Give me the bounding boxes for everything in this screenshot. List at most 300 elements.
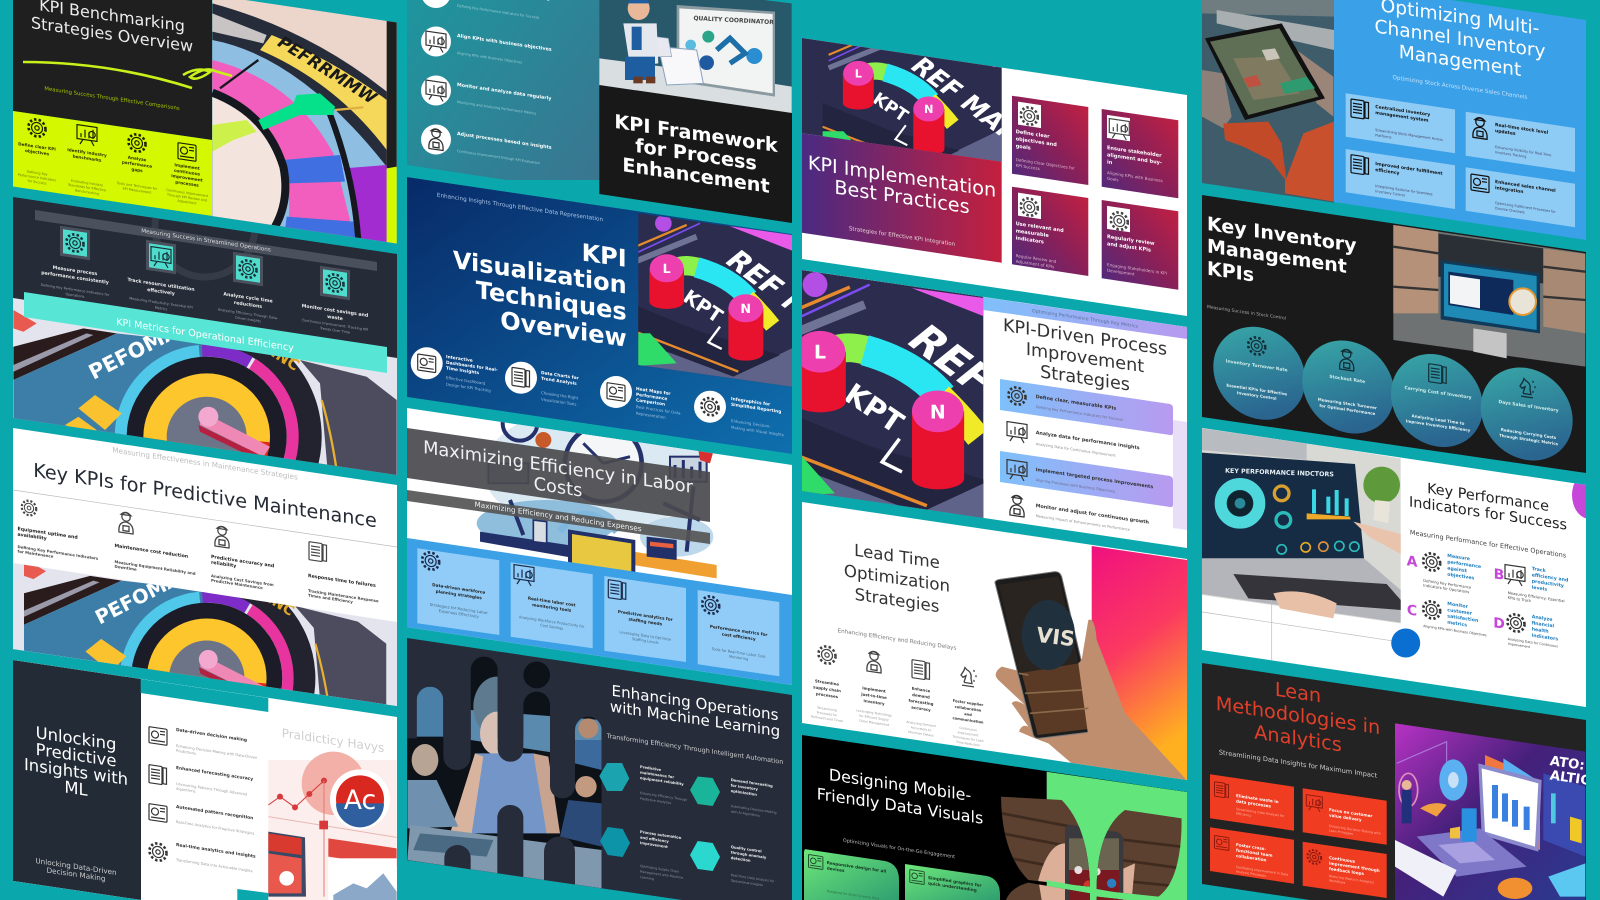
item A: Indicators for Operations	[1423, 584, 1469, 594]
item D: health	[1532, 626, 1549, 635]
item: response: Times and Efficiency	[308, 593, 353, 604]
item: uptime: availability	[18, 532, 47, 542]
card: customer value: value delivery	[1329, 812, 1362, 822]
slide: Maximizing Efficiency in Labor Costs	[407, 400, 792, 700]
subtitle: Streamlining Data Insights for Maximum Impact	[1219, 748, 1378, 780]
card: eliminate waste: Streamlining Data Analysis for	[1236, 807, 1285, 818]
item: supply chain: Streamline	[815, 678, 839, 687]
item: infographics: Enhancing Decision-	[731, 418, 771, 429]
icon	[178, 143, 196, 161]
slide base	[802, 495, 1187, 795]
card: objectives: Defining Clear Objectives for	[1016, 157, 1075, 171]
item: adjust processes	[421, 124, 552, 165]
item: implement improvement: Implement	[174, 162, 200, 171]
row: define KPIs: Defining Key Performance Indicators for Success	[1036, 405, 1123, 422]
item: analyze cycle: reductions	[234, 300, 262, 310]
card: staffing analytics	[604, 576, 686, 662]
image: performance dial	[212, 0, 397, 247]
item: demand forecasting	[690, 776, 777, 820]
item: implement improvement: Adjustment	[178, 199, 197, 206]
icon	[694, 391, 726, 423]
item: identify benchmarks	[67, 125, 107, 197]
item: dashboards	[411, 347, 498, 393]
circle: carrying cost: Improve Inventory Efficiency	[1406, 418, 1471, 433]
subtitle: Measuring Success in Streamlined Operations	[141, 227, 271, 254]
icon	[867, 650, 881, 673]
icon	[149, 727, 167, 745]
item: adjust processes: Continuous Improvement through KPI Evaluation	[457, 149, 540, 165]
card: centralized system: Streamlining Stock Management Across	[1375, 128, 1443, 142]
item: supply chain: Streamlining	[817, 706, 837, 712]
item: pattern recognition	[149, 804, 254, 836]
title: Lean	[1275, 678, 1321, 707]
icon	[422, 551, 439, 571]
cards section	[407, 538, 792, 690]
card: stock updates: updates	[1495, 128, 1516, 137]
item: analyze gaps: Tools and Techniques for	[116, 181, 158, 191]
hex icon	[600, 827, 630, 857]
item: heat maps: Representation	[636, 410, 666, 420]
item: monitor cost	[302, 266, 368, 337]
slide base	[802, 730, 1187, 900]
card: stakeholders: Aligning KPIs with Business	[1107, 170, 1163, 183]
faint ring	[152, 218, 258, 280]
slide base	[407, 400, 792, 700]
item: real-time analytics: Real-time analytics and insights	[176, 842, 256, 860]
item: define objectives: Performance Indicators	[18, 173, 56, 182]
icon	[702, 595, 719, 615]
icon	[119, 511, 133, 534]
card: review KPIs: and adjust KPIs	[1107, 241, 1151, 254]
title: Channel Inventory	[1374, 16, 1546, 63]
card: cross-functional: Facilitating Improvement in Data	[1236, 865, 1288, 877]
item: quality control	[690, 841, 775, 889]
item: uptime: Defining Key Performance Indicators	[18, 544, 99, 561]
item B: productivity	[1532, 578, 1564, 589]
slide: KPI Metrics for Operational Efficiency	[13, 197, 397, 475]
item: accuracy: Predictive Maintenance	[211, 578, 263, 590]
item: supply chain: Reduced Lead Times	[811, 714, 843, 723]
item: demand forecasting: Analyzing Demand	[906, 720, 936, 728]
item: monitor cost: Trends Over Time	[319, 326, 350, 335]
title: Predictive	[36, 740, 116, 771]
card: labor cost monitoring: Analyzing Workforce Productivity for	[519, 615, 585, 629]
circle: stockout rate: Measuring Stock Turnover	[1318, 397, 1377, 410]
item: demand forecasting: Enhance	[912, 686, 931, 693]
card: continuous improvement: improvement through	[1329, 860, 1380, 873]
item: monitor cost: Monitor cost savings and	[302, 303, 368, 319]
title: Enhancing Operations	[612, 682, 779, 724]
card: stock updates: Inventory Tracking	[1495, 150, 1526, 159]
card: responsive design	[804, 849, 899, 900]
icon	[1351, 99, 1368, 120]
item: demand forecasting: Minimize Delays	[908, 730, 934, 738]
icon	[910, 870, 924, 884]
circle: turnover rate: Essential KPIs for Effective	[1226, 383, 1287, 397]
card: simplified graphics: quick understanding	[928, 880, 977, 893]
card: workforce planning	[417, 548, 499, 635]
title: KPI Implementation	[808, 151, 996, 202]
card: workforce planning: Strategies for Reducing Labor	[430, 602, 488, 615]
item: heat maps: Best Practices for Data	[636, 404, 681, 416]
title: Analytics	[1254, 721, 1342, 756]
item: implement improvement: improvement	[171, 173, 203, 183]
item: align KPIs	[421, 26, 552, 65]
subtitle: Enhancing Insights Through Effective Data Representation	[437, 192, 604, 223]
item: predictive maintenance	[599, 763, 687, 808]
slide: Designing Mobile-Friendly Data Visuals	[802, 730, 1187, 900]
icon	[1007, 460, 1027, 481]
card: order fulfillment: Inventory Control	[1375, 189, 1405, 198]
image caption: Praldicticy Havys	[282, 726, 384, 755]
title: for Process	[635, 134, 757, 175]
item: measure process	[41, 226, 110, 303]
slide base	[407, 177, 792, 454]
image: hand holding phone	[995, 572, 1187, 780]
item: monitor data	[421, 76, 552, 116]
item: heat maps	[600, 376, 681, 422]
item: charts: Trend Analysis	[541, 376, 577, 387]
item: process automation: Management with Machine	[640, 870, 683, 880]
item: quality control: through anomaly	[731, 850, 767, 860]
item: response: Response time to failures	[308, 573, 376, 589]
title: Key Inventory	[1207, 213, 1357, 257]
card: responsive design: devices	[827, 866, 845, 873]
circle: turnover rate	[1213, 320, 1305, 426]
icon tile	[233, 252, 263, 286]
item: uptime: Equipment uptime and	[18, 526, 78, 541]
card: indicators: Regular Review and	[1016, 253, 1057, 264]
row: define KPIs: Define clear, measurable KPIs	[1036, 394, 1116, 412]
card: order fulfillment	[1346, 149, 1455, 209]
title: Enhancement	[622, 153, 770, 198]
icon	[1007, 422, 1027, 443]
rule	[13, 490, 397, 547]
hex icon	[690, 776, 720, 806]
item A: objectives	[1447, 572, 1475, 582]
card: stakeholders: alignment and buy-	[1107, 152, 1162, 166]
card: cross-functional: Foster cross-	[1236, 842, 1266, 851]
card: customer value	[1303, 788, 1387, 845]
item: process automation	[600, 827, 683, 885]
icon	[818, 645, 836, 665]
image: office doodle	[477, 406, 717, 580]
item: demand forecasting: Accurately to	[911, 725, 931, 732]
item: analyze cycle: Driven Insights	[235, 316, 261, 323]
item: cost	[114, 511, 196, 581]
item: adjust processes: Adjust processes based on insights	[457, 131, 552, 151]
title: Unlocking	[36, 723, 116, 754]
item: supplier collaboration	[952, 667, 984, 748]
item: demand forecasting: accuracy	[911, 704, 931, 712]
circle: days sales: Through Strategic Metrics	[1499, 433, 1559, 446]
item C	[1407, 600, 1487, 637]
item: analyze gaps: performance	[122, 159, 152, 169]
image: KPT dial	[472, 103, 1218, 749]
slide: Enhancing Operations with Machine Learning	[407, 630, 792, 900]
slide: KPI Visualization Techniques Overview	[407, 102, 933, 535]
item: accuracy	[211, 525, 274, 592]
card: cost efficiency metrics: Tools for Real-Time Labor Cost	[711, 647, 766, 659]
card: stakeholders: Ensure stakeholder	[1107, 145, 1162, 159]
green panel	[1047, 772, 1187, 900]
title: ML	[64, 777, 89, 800]
title: Methodologies in	[1216, 692, 1380, 739]
card: responsive design: Responsive design for all	[827, 860, 887, 874]
item: identify benchmarks: Benchmarking	[75, 188, 99, 196]
icon	[421, 76, 451, 106]
icon	[1214, 836, 1229, 850]
image: warehouse monitor	[1393, 225, 1585, 367]
icon	[1471, 174, 1489, 193]
card: customer value: Lean Principles	[1329, 828, 1353, 836]
item: demand forecasting: optimization	[731, 789, 757, 797]
decorative chart lines	[1202, 600, 1400, 700]
icon	[1107, 115, 1130, 141]
card: centralized system	[1346, 93, 1455, 153]
icon	[505, 362, 537, 394]
icon tile	[60, 226, 90, 260]
circle: days sales	[1481, 361, 1573, 467]
card: review KPIs: Development	[1107, 268, 1135, 277]
item: just-in-time: for Efficient Supply	[859, 714, 889, 722]
icon tile	[146, 240, 176, 274]
card: labor cost monitoring	[511, 562, 593, 648]
card: eliminate waste: Eliminate waste in	[1236, 793, 1279, 804]
item: forecasting	[149, 765, 253, 801]
item: implement improvement: Through KPI Review and	[166, 192, 207, 203]
item: supplier collaboration: and	[964, 712, 972, 717]
list panel	[407, 0, 600, 180]
item: heat maps: Comparison	[636, 397, 665, 408]
card: staffing analytics: Staffing Levels	[632, 637, 659, 645]
item: supplier collaboration: Time Reduction	[955, 740, 980, 747]
item: heat maps: Performance	[636, 392, 667, 402]
item: just-in-time: Implement	[862, 685, 886, 694]
icon	[1018, 102, 1041, 128]
title: Key Performance	[1427, 481, 1549, 515]
item: charts: Data Charts for	[541, 370, 579, 382]
item: charts	[505, 362, 579, 407]
item: supplier collaboration: Techniques for Lead	[952, 734, 983, 743]
slide base	[802, 30, 1187, 330]
row: define KPIs	[1000, 379, 1173, 435]
slide base	[1202, 420, 1586, 720]
item B: KPIs to Track	[1508, 596, 1532, 603]
icon	[1107, 206, 1130, 232]
cut-out top	[141, 679, 268, 712]
lime panel	[13, 111, 212, 216]
title: Designing Mobile-	[829, 765, 971, 805]
icon	[808, 855, 823, 869]
image: isometric analytics: ALTICS	[1549, 767, 1600, 790]
image: isometric analytics: ATO:	[1549, 753, 1586, 773]
item: supplier collaboration: Improvement	[958, 730, 979, 738]
card: objectives: goals	[1016, 143, 1031, 152]
card: stock updates: Enhancing Visibility for Real-Time	[1495, 145, 1551, 157]
icon	[421, 124, 451, 154]
item: just-in-time	[856, 650, 892, 727]
slide base	[13, 420, 397, 720]
icon	[1248, 336, 1265, 356]
item: just-in-time: Chain Management	[859, 719, 890, 727]
item: infographics: Simplified Reporting	[731, 402, 781, 415]
card: workforce planning: planning strategies	[436, 589, 482, 600]
title: Management	[1207, 235, 1347, 278]
icon	[128, 133, 146, 153]
card: review KPIs	[1102, 200, 1178, 290]
card: simplified graphics	[905, 864, 1000, 900]
item D: Improvement	[1508, 642, 1531, 649]
item: charts: Visualization Tools	[541, 396, 576, 407]
title: KPI Metrics for Operational Efficiency	[116, 317, 294, 354]
subtitle: Enhancing Efficiency and Reducing Delays	[838, 627, 956, 652]
circle: carrying cost: Analyzing Lead Time to	[1412, 413, 1465, 426]
circle: turnover rate: Inventory Control	[1237, 390, 1277, 401]
title: Key KPIs for Predictive Maintenance	[33, 459, 377, 532]
item: supplier collaboration: Foster supplier	[953, 699, 984, 707]
card: continuous improvement: Workflows	[1329, 878, 1346, 885]
card: stock updates: Real-time stock level	[1495, 122, 1549, 136]
icon	[514, 565, 534, 586]
image: laptop dashboard: KEY PERFORMANCE INDCTORS	[1225, 467, 1334, 478]
row: targeted improvements: Aligning Processes with Business Objectives	[1036, 478, 1115, 494]
subtitle: Strategies for Effective KPI Integration	[849, 225, 956, 248]
item: analyze gaps	[116, 133, 158, 196]
item: forecasting: Uncovering Patterns Through Advanced	[176, 782, 247, 797]
image: performance dial	[13, 298, 397, 475]
item: pattern recognition: Automated pattern recognition	[176, 804, 253, 821]
title: Indicators for Success	[1409, 494, 1567, 534]
slide: Lean Methodologies in Analytics	[1202, 655, 1600, 900]
title: Insights with	[24, 755, 128, 789]
item: quality control: Real-Time Data Analysis for	[731, 873, 775, 884]
circle: carrying cost: Carrying Cost of Inventory	[1404, 385, 1472, 401]
icon	[421, 0, 451, 8]
item: supplier collaboration: communication	[953, 716, 984, 725]
item: demand forecasting	[906, 660, 936, 738]
item: dashboards: Time Insights	[446, 365, 479, 376]
title panel	[599, 85, 792, 224]
slide base	[13, 655, 397, 900]
image: performance dial: PEFRRMMW	[275, 32, 381, 108]
row: analyze data: Analyze data for performance insights	[1036, 430, 1140, 451]
item: predictive maintenance: Enhancing Efficiency Through	[640, 791, 687, 802]
item: accuracy: Analyzing Cost Savings from	[211, 573, 274, 587]
item: align KPIs: Align KPIs with business objectives	[457, 33, 552, 53]
row: monitor growth: Measuring Impact of Enhancements on Performance	[1036, 514, 1131, 532]
image: quality coordinator: QUALITY COORDINATOR	[693, 15, 774, 26]
item C: Aligning KPIs with Business Objectives	[1423, 624, 1487, 637]
slide: Key KPIs for Predictive Maintenance	[13, 428, 397, 706]
image: isometric analytics	[1395, 723, 1600, 900]
card: cost efficiency metrics: Performance metrics for	[710, 624, 768, 637]
card: objectives: KPI Success	[1016, 163, 1040, 171]
subtitle: Decision Making	[47, 865, 105, 883]
title: Strategies Overview	[31, 13, 193, 56]
item: accuracy: reliability	[211, 560, 236, 569]
card: eliminate waste: Efficiency	[1236, 812, 1251, 818]
item: measure process: Measure process	[53, 265, 98, 277]
item: implement improvement: Continuous Improvement	[166, 188, 209, 198]
icon	[1308, 849, 1321, 865]
item: monitor cost: waste	[327, 314, 343, 322]
icon	[961, 667, 976, 687]
icon	[1340, 348, 1354, 371]
item: demand forecasting: Demand forecasting	[731, 778, 773, 788]
title: Techniques	[476, 276, 627, 326]
icon	[28, 118, 46, 138]
item: decision making	[149, 727, 257, 765]
subtitle: Optimizing Visuals for On-the-Go Engagement	[843, 838, 955, 860]
circle: days sales: Days Sales of Inventory	[1498, 399, 1559, 414]
card: staffing analytics: Predictive analytics for	[618, 609, 674, 622]
image: predictive chart: Ac	[344, 784, 376, 815]
item: dashboards: Dashboards for Real-	[446, 360, 498, 373]
item: supplier collaboration: Continuous	[959, 726, 977, 732]
card: cost efficiency metrics: Monitoring	[729, 655, 748, 661]
item: implement improvement	[166, 143, 209, 207]
card: eliminate waste: data processes	[1236, 798, 1271, 809]
slide: Unlocking Predictive Insights with ML	[13, 655, 397, 900]
cut-out bottom	[237, 889, 268, 900]
item: demand forecasting: for inventory	[731, 784, 758, 792]
item C: customer	[1447, 607, 1473, 617]
title panel	[13, 660, 141, 900]
item: analyze gaps: KPI Measurement	[123, 186, 152, 195]
item: decision making: Data-driven decision making	[176, 727, 247, 744]
slide base	[1202, 655, 1586, 900]
item: predictive maintenance: equipment reliability	[640, 776, 684, 787]
card: cross-functional: collaboration	[1236, 853, 1267, 863]
item: charts: Choosing the Right	[541, 390, 579, 401]
icon	[421, 26, 451, 56]
item B: B	[1494, 566, 1504, 584]
row: monitor growth: Monitor and adjust for continuous growth	[1036, 503, 1150, 526]
item: forecasting: Algorithms	[176, 787, 196, 794]
item: define objectives	[18, 118, 56, 187]
card: channel integration: Optimizing Fulfillment Processes for	[1495, 201, 1556, 214]
circle: stockout rate: for Optimal Performance	[1319, 403, 1376, 416]
title bar	[24, 292, 387, 373]
card: indicators: Use relevant and	[1016, 221, 1064, 234]
title: Overview	[500, 306, 627, 353]
title band	[407, 428, 710, 522]
icon	[215, 525, 229, 548]
title: KPI Framework	[614, 110, 779, 157]
card: simplified graphics: Simplified graphics for	[928, 875, 983, 888]
item: infographics	[694, 391, 784, 437]
item C: metrics	[1447, 620, 1467, 629]
card: stakeholders	[1102, 109, 1178, 198]
item: quality control: detection	[731, 856, 751, 863]
item: monitor data: Monitoring and Analyzing Performance Metrics	[457, 100, 536, 116]
card: channel integration: integration	[1495, 185, 1523, 195]
blue dot	[1391, 628, 1420, 658]
item C: satisfaction	[1447, 613, 1478, 624]
item: predictive maintenance: Predictive	[640, 765, 662, 772]
slide base	[1202, 190, 1586, 480]
image: team at display table	[407, 650, 602, 898]
slide base	[407, 630, 792, 900]
item A	[1407, 552, 1481, 595]
item: define objectives: objectives	[25, 148, 50, 157]
item: process automation: improvement	[640, 841, 668, 849]
image: laptop dashboard	[1202, 427, 1401, 623]
item A: performance	[1447, 559, 1481, 570]
title: Friendly Data Visuals	[817, 784, 983, 828]
card: indicators: indicators	[1016, 235, 1044, 246]
